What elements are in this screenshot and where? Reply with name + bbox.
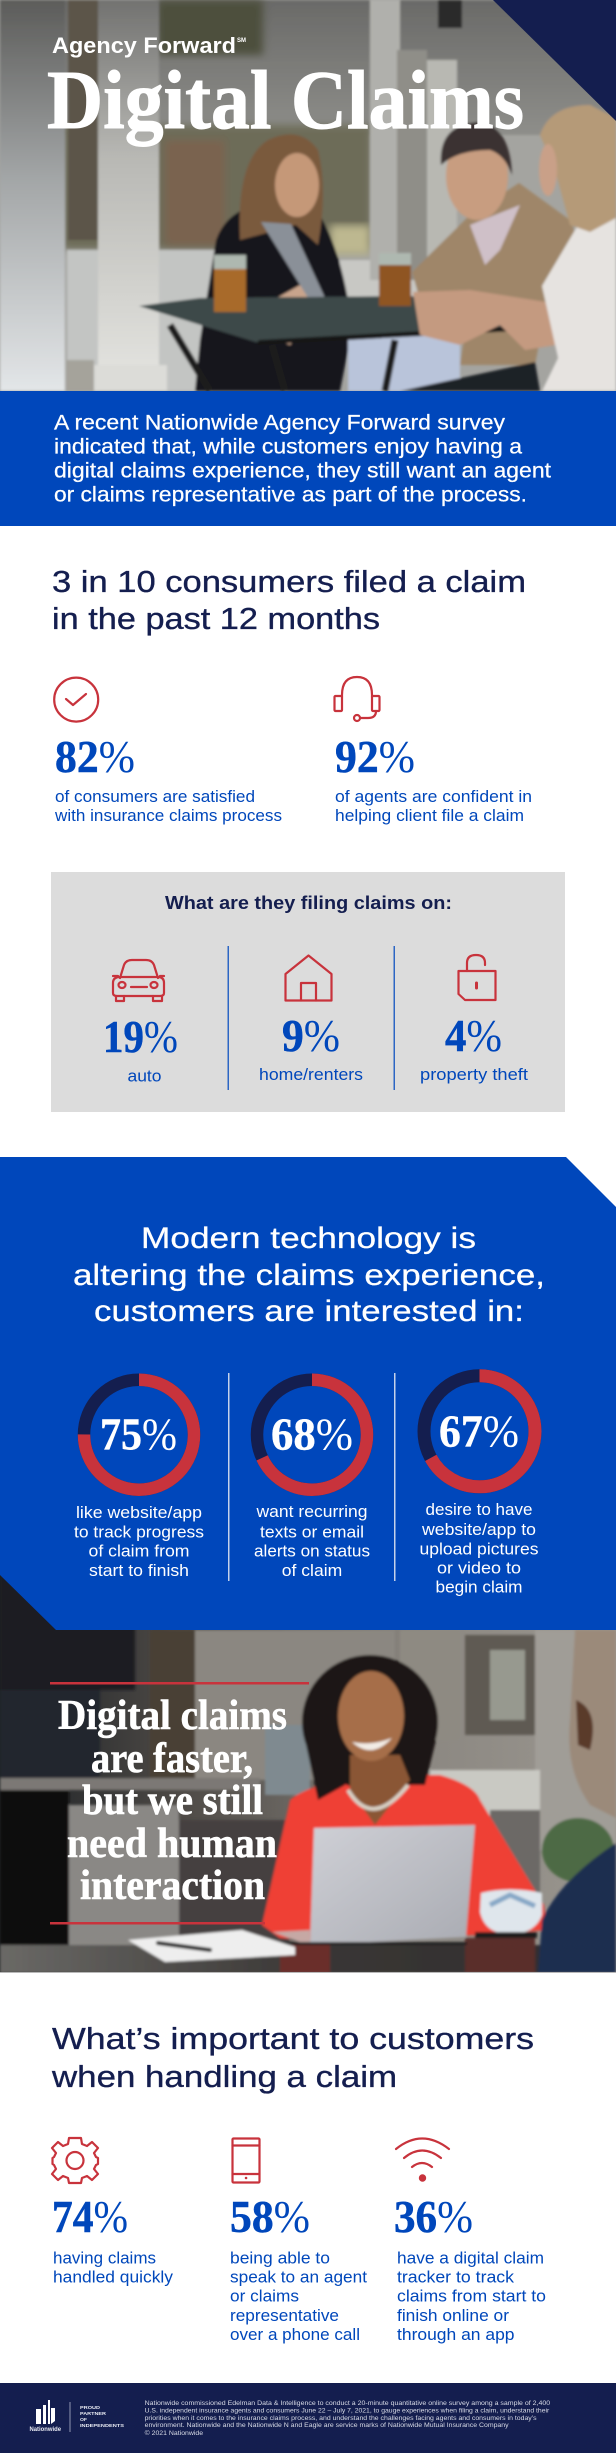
heading: 3 in 10 consumers: 3 in 10 consumers filed a claim xyxy=(52,564,526,599)
item: property theft: 4% xyxy=(445,1011,502,1061)
stat: 36%: 36% xyxy=(394,2192,473,2242)
stat: 92% agents confident: helping client file a claim xyxy=(335,807,524,825)
heading: modern technology: Modern technology is xyxy=(141,1222,476,1255)
stat: 36%: through an app xyxy=(397,2326,514,2344)
intro band: A recent Nationwide Agency Forward survey xyxy=(54,410,505,434)
callout: digital claims are faster: interaction xyxy=(80,1863,265,1909)
arms xyxy=(413,290,556,350)
iced tea glasses xyxy=(214,255,246,312)
stat: 82% consumers satisfied xyxy=(54,678,282,825)
partner tagline: PARTNER xyxy=(80,2411,107,2417)
woman with blonde hair xyxy=(542,215,616,391)
stat: 36%: finish online or xyxy=(397,2307,510,2325)
stat: 74%: handled quickly xyxy=(53,2269,174,2287)
icon: headset xyxy=(334,677,380,721)
donut caption: desire to have xyxy=(426,1501,532,1519)
donut caption: upload pictures xyxy=(420,1540,538,1558)
item: auto xyxy=(103,960,178,1086)
heading: modern technology: altering the claims experience, xyxy=(73,1259,545,1292)
intro band: digital claims experience, they still want an agent xyxy=(54,458,551,482)
stat: 74%: 74% xyxy=(52,2192,128,2242)
heading: 3 in 10 consumers: in the past 12 months xyxy=(52,601,380,636)
stat: 58%: 58% xyxy=(230,2192,310,2242)
donut caption: want recurring xyxy=(255,1503,368,1521)
item: auto: 19% xyxy=(103,1012,178,1062)
heading: what's important xyxy=(51,2021,534,2094)
heading: what's important: What’s important to customers xyxy=(52,2021,534,2056)
icon: open lock xyxy=(458,955,496,1000)
panel: what are they filing claims on: What are they filing claims on: xyxy=(165,893,452,913)
blue section background xyxy=(0,1157,616,1630)
icon: house xyxy=(286,956,332,1000)
vase under table xyxy=(348,330,460,391)
notebook and pen xyxy=(128,1930,295,1962)
stat: 58%: representative xyxy=(230,2307,339,2325)
laptop xyxy=(310,1825,475,1945)
navy corner triangle xyxy=(493,0,616,121)
item: auto: auto xyxy=(128,1068,162,1086)
donut: 68%: 68% xyxy=(271,1408,353,1459)
icon: gear xyxy=(52,2138,98,2183)
stat: 58% xyxy=(230,2138,367,2344)
item: property theft: property theft xyxy=(420,1066,528,1084)
stat: 92% agents confident xyxy=(334,677,532,825)
title: Digital Claims xyxy=(47,54,524,147)
icon: wifi signal xyxy=(396,2138,449,2181)
table top xyxy=(139,296,515,343)
donut caption xyxy=(74,1504,204,1580)
heading: modern technology: customers are interested in: xyxy=(94,1295,524,1328)
partner tagline: INDEPENDENTS xyxy=(80,2423,125,2429)
donut caption: begin claim xyxy=(436,1579,522,1597)
stat: 92% agents confident: of agents are confident in xyxy=(335,788,532,806)
logo: Nationwide xyxy=(30,2400,62,2433)
donut: 75% xyxy=(74,1380,204,1580)
donut caption: alerts on status xyxy=(254,1543,370,1561)
stat: 58%: being able to xyxy=(230,2249,330,2267)
item: home/renters: 9% xyxy=(282,1011,340,1061)
donut caption: website/app to xyxy=(421,1521,536,1539)
partner tagline: PROUD xyxy=(80,2405,101,2411)
stat: 82% consumers satisfied: with insurance claims process xyxy=(54,807,282,825)
donut: 68% xyxy=(254,1380,370,1580)
donut caption: like website/app xyxy=(76,1504,202,1522)
callout: digital claims are faster: are faster, xyxy=(91,1736,253,1782)
stat: 58%: or claims xyxy=(230,2288,299,2306)
partner tagline xyxy=(80,2405,125,2429)
icon: smartphone xyxy=(232,2138,260,2182)
donut caption xyxy=(254,1503,370,1580)
callout: digital claims are faster: but we still xyxy=(82,1778,263,1824)
donut caption xyxy=(420,1501,538,1597)
donut: 75%: 75% xyxy=(100,1408,177,1459)
footer xyxy=(0,2383,616,2453)
stat: 36%: tracker to track xyxy=(397,2269,515,2287)
item: home/renters xyxy=(259,956,363,1084)
man in foreground xyxy=(569,1630,616,1818)
hair xyxy=(302,1655,438,1789)
intro band: or claims representative as part of the process. xyxy=(54,482,527,506)
stat: 74%: having claims xyxy=(53,2249,156,2267)
intro band xyxy=(0,391,616,526)
footnote: priorities when it comes to the insurance claims process, and understand the challenges facing agents and consumers in today’s xyxy=(145,2415,537,2422)
man in tan sweater xyxy=(412,183,580,365)
footnote: U.S. independent insurance agents and consumers June 22 – July 7, 2021, to gauge experiences when filing a claim, understand their xyxy=(145,2408,550,2415)
donut caption: or video to xyxy=(437,1560,521,1578)
footnote: environment. Nationwide and the Nationwide N and Eagle are service marks of Nationwide Mutual Insurance Company xyxy=(145,2422,509,2429)
stat: 36%: claims from start to xyxy=(397,2288,546,2306)
donut caption: of claim from xyxy=(88,1543,190,1561)
stat: 58%: over a phone call xyxy=(230,2326,360,2344)
donut: 67%: 67% xyxy=(439,1406,519,1457)
donut caption: of claim xyxy=(282,1562,342,1580)
cup xyxy=(480,1890,542,1934)
title: Agency Forward xyxy=(52,33,236,58)
partner tagline: OF xyxy=(80,2417,87,2423)
footnote: © 2021 Nationwide xyxy=(145,2429,203,2437)
stat: 92% agents confident: 92% xyxy=(335,732,415,782)
callout: digital claims are faster: Digital claims xyxy=(58,1693,287,1739)
item: home/renters: home/renters xyxy=(259,1066,363,1084)
footnote: Nationwide commissioned Edelman Data & Intelligence to conduct a 20-minute quantitative online survey among a sample of 2,400 xyxy=(145,2400,550,2407)
panel: what are they filing claims on xyxy=(51,872,565,1112)
icon: car xyxy=(113,960,164,1001)
donut caption: texts or email xyxy=(260,1524,364,1542)
heading: 3 in 10 consumers xyxy=(52,564,526,636)
woman with tablet xyxy=(195,207,352,391)
hero photo: three people at a table xyxy=(0,0,616,391)
donut: 67% xyxy=(420,1376,538,1597)
stat: 82% consumers satisfied: 82% xyxy=(55,732,135,782)
stat: 82% consumers satisfied: of consumers are satisfied xyxy=(55,788,255,806)
stat: 36%: have a digital claim xyxy=(397,2249,544,2267)
plant xyxy=(542,1818,614,1882)
footnote xyxy=(145,2400,550,2437)
logo: Nationwide: Nationwide xyxy=(30,2427,62,2433)
icon: check circle xyxy=(54,678,98,722)
intro band: indicated that, while customers enjoy having a xyxy=(54,434,522,458)
item: property theft xyxy=(420,955,528,1084)
stat: 74% xyxy=(52,2138,174,2287)
title: SM xyxy=(237,38,246,44)
stat: 36% xyxy=(394,2138,546,2344)
photo: smiling woman at laptop xyxy=(0,1570,616,1973)
heading: modern technology xyxy=(73,1222,545,1328)
callout: digital claims are faster xyxy=(50,1682,309,1924)
donut caption: start to finish xyxy=(89,1562,189,1580)
callout: digital claims are faster: need human xyxy=(67,1821,277,1867)
blouse xyxy=(262,1775,546,1940)
heading: what's important: when handling a claim xyxy=(51,2059,397,2094)
table xyxy=(0,1945,616,1973)
donut caption: to track progress xyxy=(74,1524,204,1542)
neck and face xyxy=(350,1755,410,1825)
stat: 58%: speak to an agent xyxy=(230,2269,367,2287)
